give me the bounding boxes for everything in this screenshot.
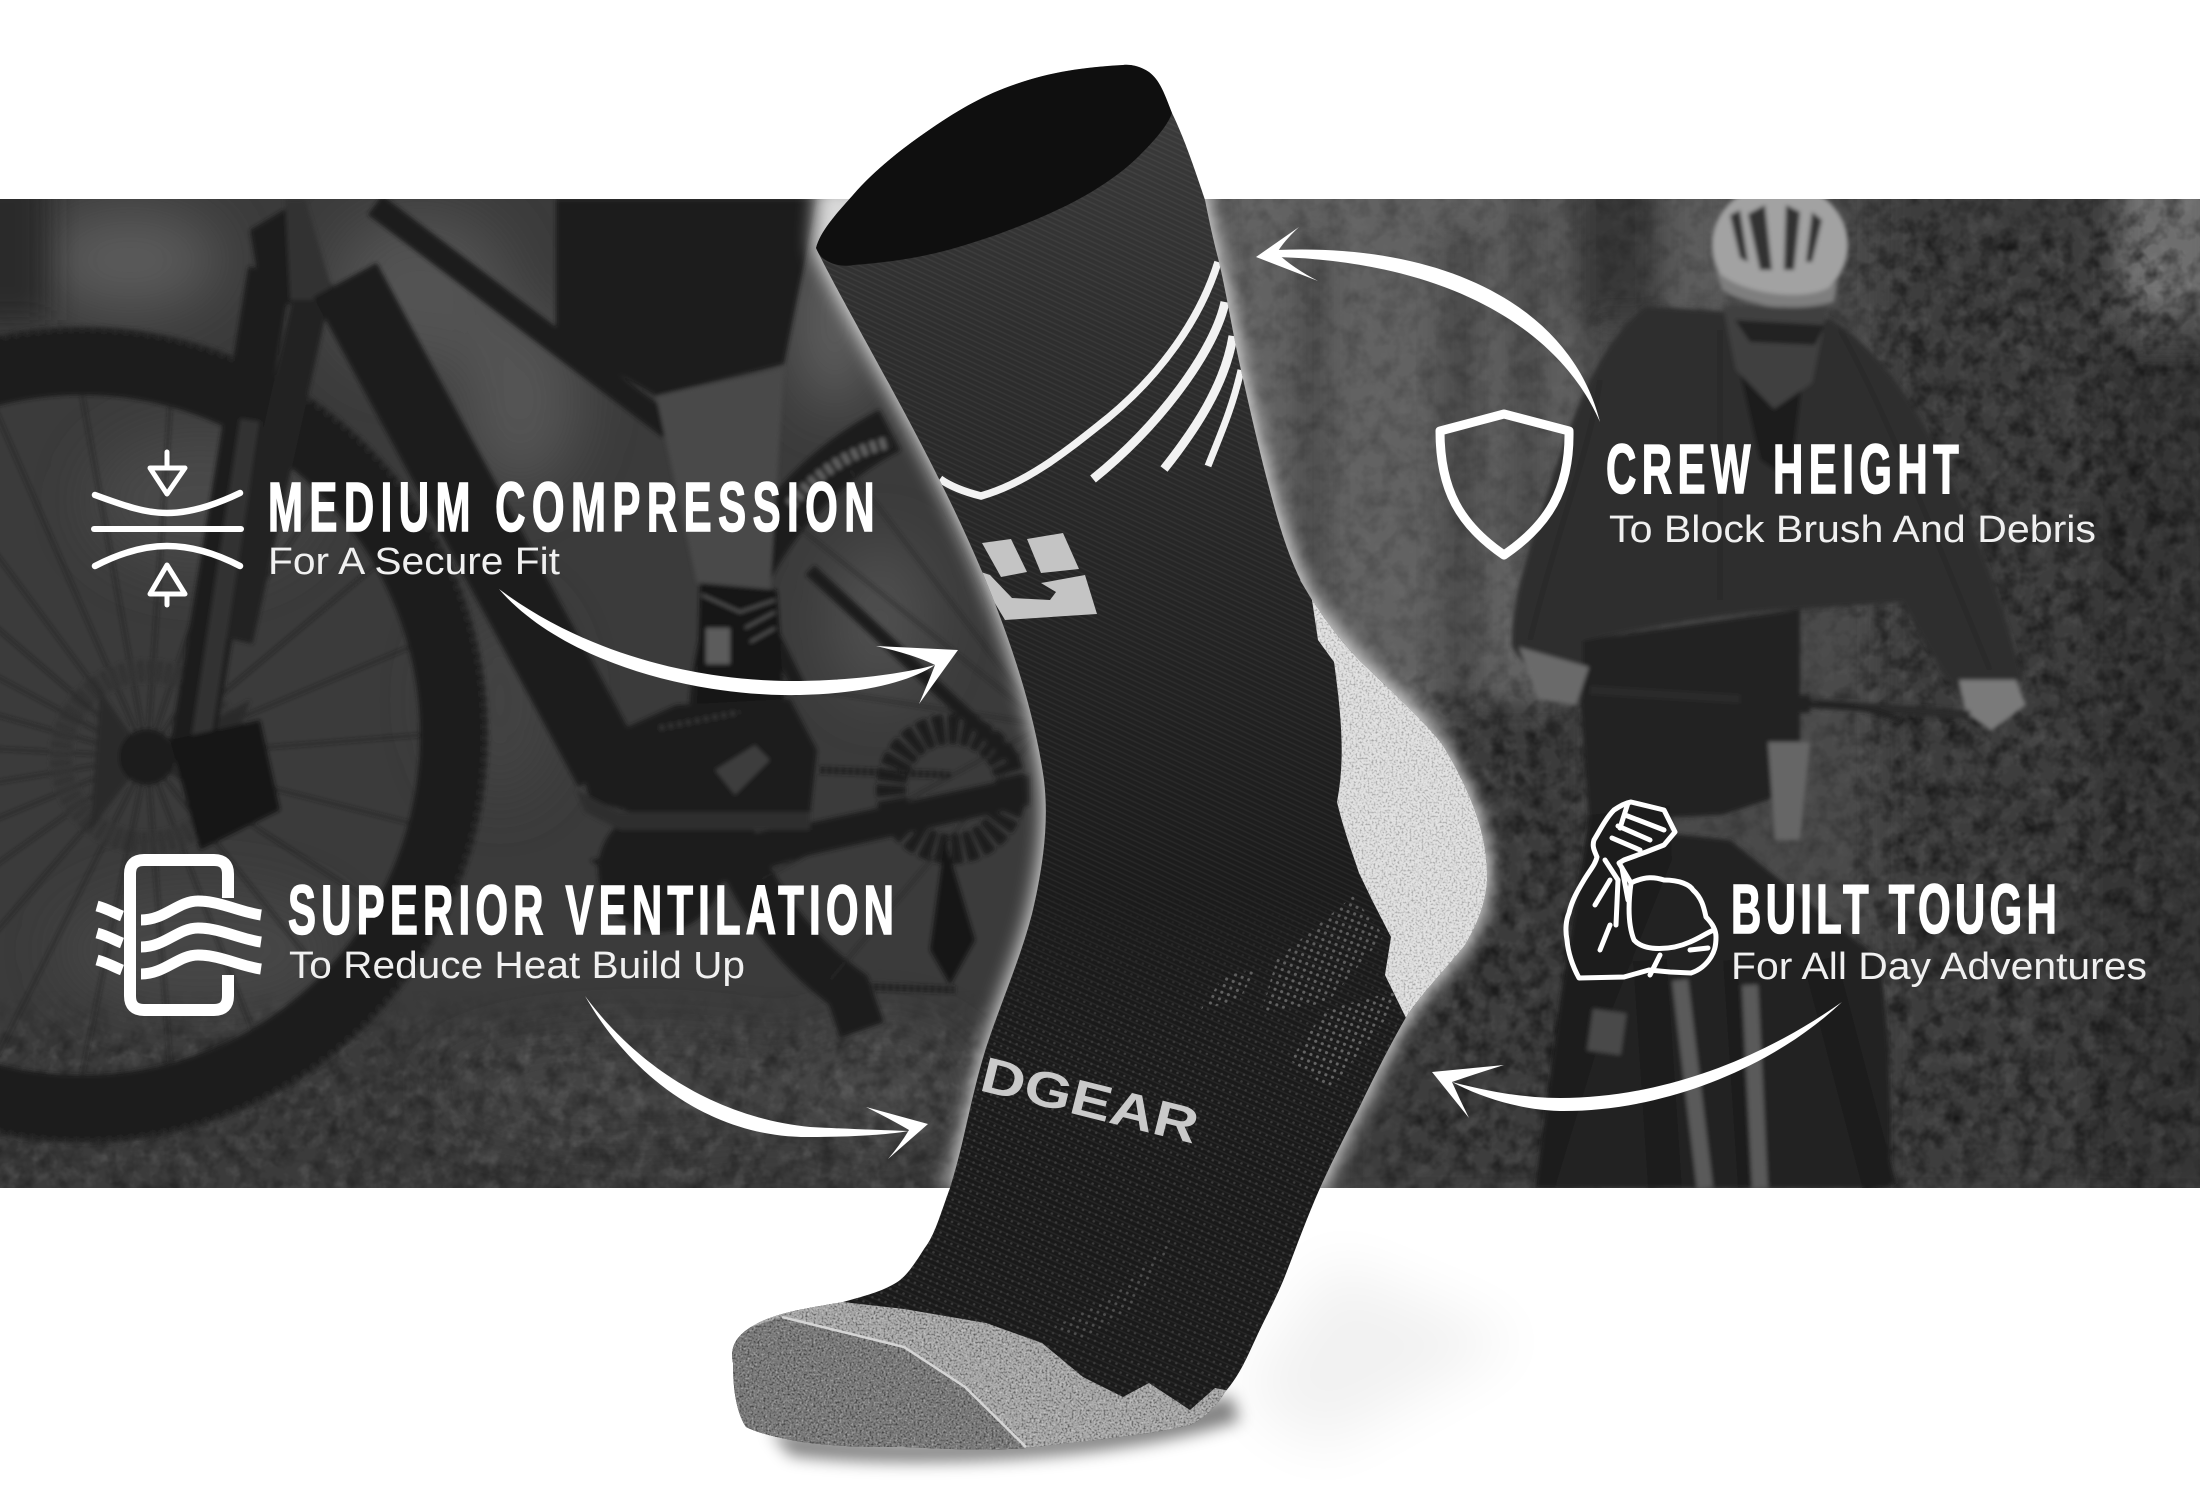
icon: ventilation panel — [97, 860, 261, 1010]
leg — [656, 368, 784, 590]
feature: crew height — [1256, 227, 2096, 555]
toe panel — [700, 1295, 1240, 1470]
cassette and derailleur — [891, 729, 1011, 849]
shoe — [576, 699, 817, 815]
logo on sock — [975, 533, 1097, 620]
background photo: mountain biker (left) and rider (right) — [0, 170, 2200, 1200]
soft floor shadow — [770, 1260, 1520, 1462]
rider sock — [697, 583, 784, 705]
heading: MEDIUM COMPRESSION — [268, 469, 875, 547]
compression stripes — [940, 262, 1241, 496]
subheading: To Reduce Heat Build Up — [289, 945, 745, 987]
front tire — [0, 361, 454, 1109]
front bike wheel and fork — [1540, 830, 1891, 1188]
rider lower leg — [1535, 805, 1672, 1188]
heading: SUPERIOR VENTILATION — [288, 872, 894, 950]
icon: shield — [1440, 414, 1569, 555]
right photo base — [1100, 199, 2200, 1188]
arrow pointing at sock heel — [1432, 1002, 1842, 1118]
feature: superior ventilation — [97, 860, 928, 1159]
arrow pointing at sock — [499, 589, 958, 704]
heading: BUILT TOUGH — [1731, 871, 2057, 949]
sock opening inner — [816, 65, 1172, 266]
subheading: For All Day Adventures — [1731, 946, 2147, 988]
icon: flexed arm — [1566, 802, 1716, 978]
shorts — [556, 199, 817, 396]
disc rotor — [61, 671, 233, 843]
hands — [1519, 647, 1589, 705]
sock halo glow — [816, 190, 1487, 1188]
feature: built tough — [1432, 802, 2147, 1118]
jacket — [1512, 306, 2023, 700]
front wheel spokes — [0, 395, 422, 1075]
heel panel — [1300, 560, 1530, 1030]
frame tubes — [375, 205, 670, 428]
heading: CREW HEIGHT — [1606, 431, 1959, 509]
arrow pointing at sock cuff — [1256, 227, 1600, 422]
sock ankle and foot mesh — [800, 880, 1500, 1440]
helmet — [1712, 183, 1848, 307]
feature: medium compression — [94, 452, 958, 704]
face — [1723, 306, 1828, 409]
sock product image — [700, 50, 1530, 1470]
sock body — [700, 50, 1520, 1470]
rear wheel — [712, 430, 890, 1030]
pants — [1576, 609, 1800, 821]
ventilation patches — [1050, 896, 1400, 1340]
arrow pointing at sock — [585, 996, 928, 1159]
handlebar and stem — [1590, 690, 1970, 715]
subheading: To Block Brush And Debris — [1609, 509, 2096, 551]
icon: compression arrows — [94, 452, 241, 605]
fork — [190, 270, 270, 760]
subheading: For A Secure Fit — [268, 541, 560, 583]
brand text on sock: DGEAR — [975, 1046, 1204, 1154]
